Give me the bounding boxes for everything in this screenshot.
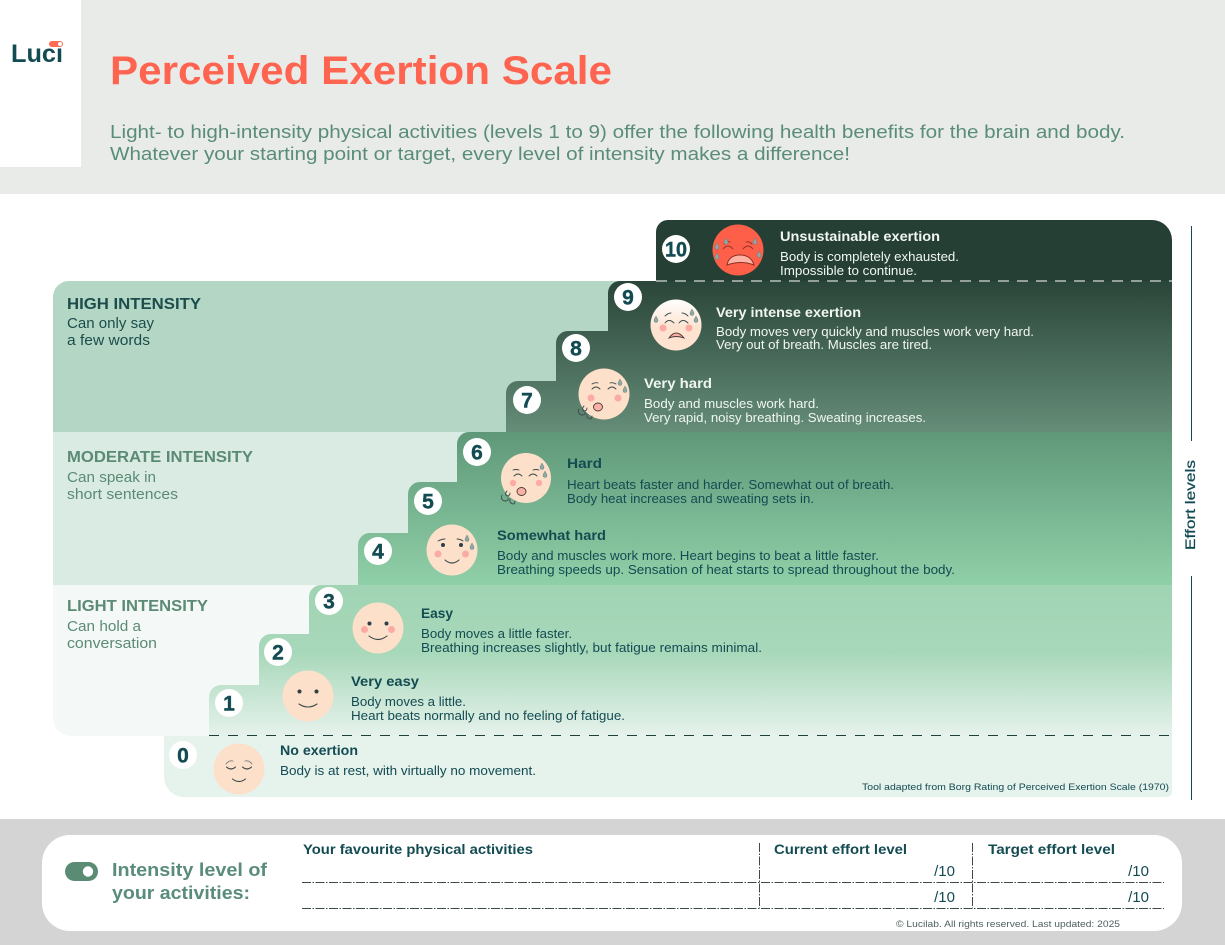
panel: moderate intensity: Can speak in (67, 470, 156, 486)
level 6: Body heat increases and sweating sets in. (567, 491, 814, 506)
column headings: Your favourite physical activities (303, 841, 533, 857)
step: level 10 background (656, 220, 1172, 281)
icon: very hard face (578, 368, 630, 420)
level 4: Somewhat hard (497, 528, 606, 543)
level 3: 3 (323, 590, 335, 614)
panel: light intensity (53, 585, 320, 736)
score fields (934, 863, 1149, 906)
steps: high intensity background (506, 281, 1172, 432)
steps: moderate intensity background (358, 432, 1172, 585)
footer band (0, 819, 1225, 945)
score fields: /10 (1128, 863, 1149, 880)
column headings: Target effort level (988, 841, 1115, 857)
panel: high intensity (53, 281, 620, 432)
level 4 (364, 524, 955, 577)
score fields: /10 (1128, 889, 1149, 906)
level 8: 8 (570, 338, 582, 360)
icon: very intense face (650, 300, 702, 350)
level 5 (414, 487, 442, 515)
intro text: Whatever your starting point or target, every level of intensity makes a difference! (110, 144, 850, 164)
intro text (110, 122, 1125, 164)
activity log heading: your activities: (112, 883, 250, 903)
panel: light intensity: Can hold a (67, 619, 142, 635)
level 7: Body and muscles work hard. (644, 396, 819, 411)
header band (0, 0, 1225, 194)
step: level 0 background (164, 736, 1172, 797)
level 9: Body moves very quickly and muscles work very hard. (716, 324, 1034, 339)
column headings (303, 841, 1115, 857)
level 7: 7 (521, 390, 533, 412)
intro text: Light- to high-intensity physical activities (levels 1 to 9) offer the following health benefits for the brain and body. (110, 122, 1125, 142)
title: Perceived Exertion Scale (110, 49, 612, 93)
level 7 (513, 368, 926, 425)
icon: resting face (214, 744, 264, 794)
logo: Luci (11, 40, 63, 68)
icon: exhausted face (712, 224, 764, 276)
level 10: Impossible to continue. (780, 263, 917, 278)
level 9 (614, 283, 1034, 352)
level 10: 10 (665, 238, 687, 262)
level 7: Very rapid, noisy breathing. Sweating increases. (644, 410, 926, 425)
panel: light intensity: LIGHT INTENSITY (67, 598, 208, 615)
panel: activity log (42, 835, 1182, 931)
column headings: Current effort level (774, 841, 907, 857)
level 4: 4 (372, 540, 384, 564)
level 0: Body is at rest, with virtually no movement. (280, 763, 536, 778)
score fields: /10 (934, 863, 955, 880)
level 6 (463, 438, 894, 506)
copyright: © Lucilab. All rights reserved. Last updated: 2025 (896, 919, 1120, 930)
level 10 (662, 224, 959, 278)
level 6: 6 (471, 442, 483, 464)
level 8 (562, 334, 590, 362)
panel: high intensity: Can only say (67, 316, 155, 332)
level 6: Hard (567, 456, 602, 471)
level 2 (264, 638, 292, 666)
source credit: Tool adapted from Borg Rating of Perceived Exertion Scale (1970) (862, 782, 1169, 793)
level 9: Very out of breath. Muscles are tired. (716, 337, 932, 352)
level 0 (169, 741, 536, 794)
level 3 (315, 587, 762, 655)
score fields: /10 (934, 889, 955, 906)
activity log heading: Intensity level of (112, 860, 268, 880)
level 10: Body is completely exhausted. (780, 249, 959, 264)
axis: effort levels: Effort levels (1182, 460, 1198, 550)
icon: easy face (352, 602, 404, 654)
icon: toggle (65, 862, 98, 881)
level 3: Body moves a little faster. (421, 626, 572, 641)
panel: high intensity: HIGH INTENSITY (67, 296, 201, 313)
panel: moderate intensity: MODERATE INTENSITY (67, 449, 253, 466)
level 3: Easy (421, 606, 453, 621)
level 9: 9 (622, 286, 634, 310)
level 6: Heart beats faster and harder. Somewhat out of breath. (567, 477, 894, 492)
panel: moderate intensity (53, 432, 473, 585)
level 1: 1 (223, 692, 235, 716)
level 4: Breathing speeds up. Sensation of heat starts to spread throughout the body. (497, 562, 955, 577)
panel: moderate intensity: short sentences (67, 487, 178, 503)
icon: hard face (501, 453, 551, 504)
level 1: Heart beats normally and no feeling of fatigue. (351, 708, 625, 723)
panel: high intensity: a few words (67, 333, 150, 349)
level 10: Unsustainable exertion (780, 229, 940, 244)
level 3: Breathing increases slightly, but fatigue remains minimal. (421, 640, 762, 655)
level 0: No exertion (280, 743, 358, 758)
level 0: 0 (177, 744, 189, 768)
level 2: 2 (272, 642, 284, 664)
level 9: Very intense exertion (716, 305, 861, 320)
level 1 (215, 670, 625, 723)
level 1: Body moves a little. (351, 694, 466, 709)
icon: somewhat hard face (426, 524, 478, 576)
level 1: Very easy (351, 674, 420, 689)
icon: very easy face (282, 670, 334, 722)
panel: light intensity: conversation (67, 636, 157, 652)
steps: light intensity background (209, 585, 1172, 736)
level 4: Body and muscles work more. Heart begins to beat a little faster. (497, 548, 879, 563)
activity log heading (112, 860, 268, 903)
level 7: Very hard (644, 376, 712, 391)
level 5: 5 (422, 490, 434, 514)
